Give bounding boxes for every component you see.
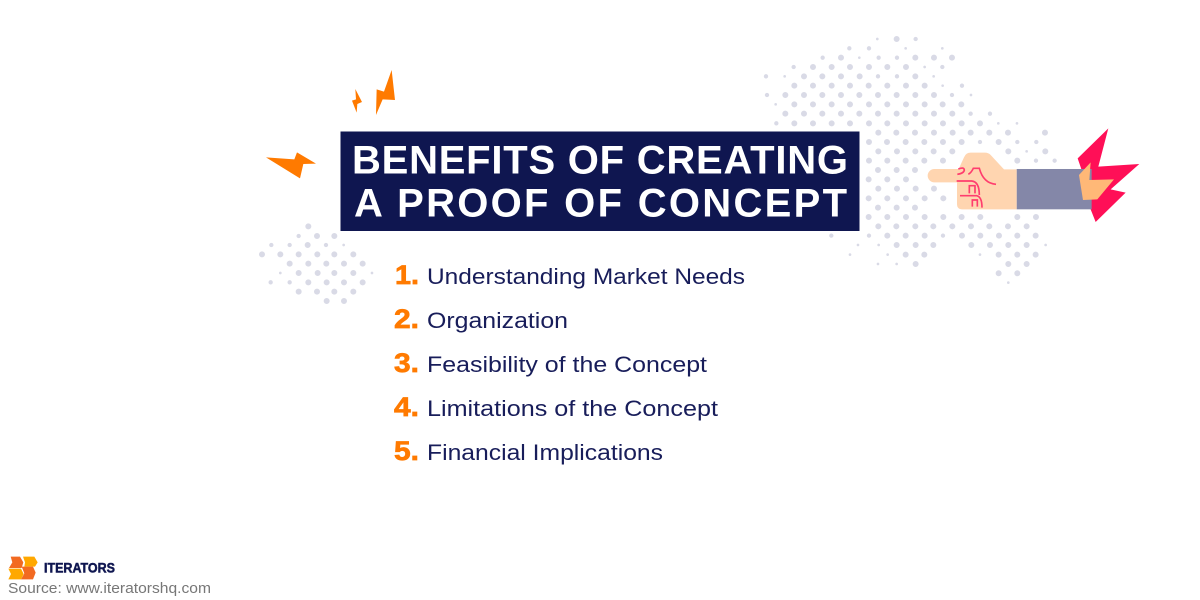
pink burst — [1078, 128, 1139, 222]
item 3 — [394, 348, 708, 378]
orange wrist patch — [1079, 162, 1114, 200]
item 4 — [394, 392, 719, 422]
dot pattern: upper right cloud — [766, 39, 1055, 283]
title banner: A PROOF OF CONCEPT — [354, 182, 847, 226]
source line: Source: www.iteratorshq.com — [8, 581, 211, 597]
numbered list of benefits — [394, 260, 745, 466]
item 3: 3. — [394, 348, 419, 378]
item 3: Feasibility of the Concept — [427, 352, 708, 377]
item 5 — [394, 436, 663, 466]
item 2: Organization — [427, 308, 568, 333]
item 5: 5. — [394, 436, 419, 466]
finger lines — [957, 168, 996, 208]
fist and pointing finger — [928, 153, 1017, 209]
title banner — [340, 132, 860, 231]
icon: pointing hand with sleeve and burst — [928, 128, 1139, 222]
logo: Iterators — [8, 557, 115, 579]
title banner: BENEFITS OF CREATING — [352, 138, 848, 182]
item 1: Understanding Market Needs — [427, 264, 745, 289]
item 4: Limitations of the Concept — [427, 396, 719, 421]
logo wordmark: ITERATORS — [44, 560, 115, 576]
orange lightning bolts — [266, 70, 395, 178]
item 4: 4. — [394, 392, 419, 422]
item 2 — [394, 304, 568, 334]
dot pattern: lower left cloud — [262, 226, 372, 301]
item 1: 1. — [395, 260, 419, 290]
item 1 — [395, 260, 745, 290]
item 2: 2. — [394, 304, 419, 334]
sleeve — [1017, 169, 1092, 209]
logo mark — [8, 557, 38, 579]
item 5: Financial Implications — [427, 440, 663, 465]
